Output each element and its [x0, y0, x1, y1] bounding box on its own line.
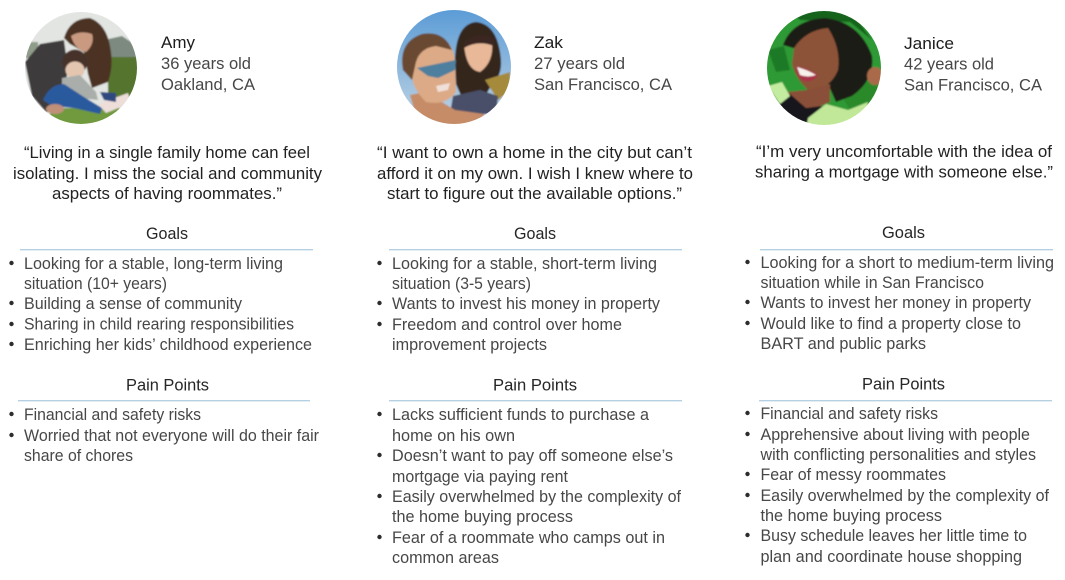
pain points list: Amy: Worried that not everyone will do their fair: [24, 427, 319, 445]
name and details: Zak: San Francisco, CA: [534, 76, 672, 94]
goals list: Amy: Enriching her kids’ childhood experience: [24, 336, 312, 354]
quote: Janice: [755, 143, 1053, 182]
heading: Pain Points: Pain Points: [862, 376, 945, 394]
name and details: Amy: 36 years old: [161, 55, 251, 73]
pain points list: Janice: Busy schedule leaves her little time to: [760, 527, 1027, 545]
pain points list: Janice: [745, 405, 1049, 566]
quote: Amy: isolating. I miss the social and community: [13, 165, 323, 183]
pain points list: Janice: Financial and safety risks: [760, 405, 938, 423]
goals list: Janice: Looking for a short to medium-term living: [760, 254, 1054, 272]
goals list: Zak: improvement projects: [392, 336, 547, 354]
quote: Janice: “I’m very uncomfortable with the idea of: [756, 143, 1052, 161]
pain points list: Janice: Fear of messy roommates: [760, 466, 946, 484]
quote: Zak: “I want to own a home in the city but can’t: [377, 144, 692, 162]
pain points list: Zak: Fear of a roommate who camps out in: [392, 529, 665, 547]
quote: Zak: start to figure out the available options.”: [387, 185, 682, 203]
goals list: Janice: Wants to invest her money in property: [760, 294, 1032, 312]
goals list: Amy: Sharing in child rearing responsibilities: [24, 316, 294, 334]
name and details: Janice: Janice: [904, 35, 954, 53]
pain points list: Amy: share of chores: [24, 447, 133, 465]
pain points list: Zak: Lacks sufficient funds to purchase a: [392, 406, 650, 424]
heading: Goals: Goals: [146, 225, 188, 243]
name and details: Janice: [904, 35, 1042, 94]
quote: Amy: aspects of having roommates.”: [52, 185, 282, 203]
name and details: Zak: 27 years old: [534, 55, 625, 73]
goals list: Zak: Freedom and control over home: [392, 316, 622, 334]
portrait: Zak with partner: [397, 10, 511, 124]
heading: Pain Points: Pain Points: [126, 376, 209, 394]
pain points list: Zak: common areas: [392, 549, 499, 567]
heading: Goals: Goals: [882, 224, 925, 242]
pain points list: Zak: home on his own: [392, 427, 515, 445]
goals list: Janice: BART and public parks: [760, 335, 926, 353]
pain points list: Zak: [377, 406, 681, 567]
quote: Janice: sharing a mortgage with someone else.”: [755, 164, 1053, 182]
name and details: Amy: Oakland, CA: [161, 76, 255, 94]
goals list: Amy: Looking for a stable, long-term living: [24, 255, 283, 273]
pain points list: Zak: the home buying process: [392, 508, 573, 526]
goals list: Janice: situation while in San Francisco: [760, 274, 984, 292]
quote: Zak: afford it on my own. I wish I knew where to: [377, 165, 693, 183]
pain points list: Janice: the home buying process: [760, 507, 942, 525]
heading: Goals: Goals: [514, 225, 556, 243]
goals list: Zak: Looking for a stable, short-term living: [392, 255, 657, 273]
pain points list: Janice: Easily overwhelmed by the complexity of: [760, 487, 1049, 505]
goals list: Zak: [377, 255, 661, 354]
persona column: Janice: [745, 8, 1054, 566]
pain points list: Janice: with conflicting personalities and styles: [760, 446, 1036, 464]
name and details: Zak: Zak: [534, 34, 564, 52]
portrait: Amy with child: [25, 12, 137, 124]
pain points list: Amy: Financial and safety risks: [24, 406, 201, 424]
goals list: Amy: situation (10+ years): [24, 275, 167, 293]
goals list: Zak: Wants to invest his money in property: [392, 295, 661, 313]
pain points list: Zak: Easily overwhelmed by the complexity of: [392, 488, 681, 506]
goals list: Amy: [9, 255, 312, 354]
pain points list: Janice: Apprehensive about living with people: [760, 426, 1030, 444]
heading: Pain Points: Pain Points: [493, 376, 577, 394]
portrait: Janice lying on grass: [767, 11, 881, 125]
name and details: Amy: Amy: [161, 34, 196, 52]
name and details: Zak: [534, 34, 672, 94]
name and details: Amy: [161, 34, 255, 94]
pain points list: Janice: plan and coordinate house shopping: [760, 548, 1022, 566]
goals list: Zak: situation (3-5 years): [392, 275, 531, 293]
quote: Zak: [377, 144, 693, 203]
pain points list: Zak: Doesn’t want to pay off someone else’s: [392, 447, 673, 465]
goals list: Janice: Would like to find a property close to: [760, 315, 1021, 333]
quote: Amy: “Living in a single family home can feel: [24, 144, 310, 162]
name and details: Janice: San Francisco, CA: [904, 76, 1042, 94]
pain points list: Zak: mortgage via paying rent: [392, 468, 568, 486]
goals list: Janice: [745, 254, 1054, 353]
persona column: Zak: [377, 8, 693, 567]
quote: Amy: [13, 144, 323, 203]
name and details: Janice: 42 years old: [904, 56, 994, 74]
persona column: Amy: [9, 8, 323, 465]
pain points list: Amy: [9, 406, 319, 465]
goals list: Amy: Building a sense of community: [24, 295, 243, 313]
